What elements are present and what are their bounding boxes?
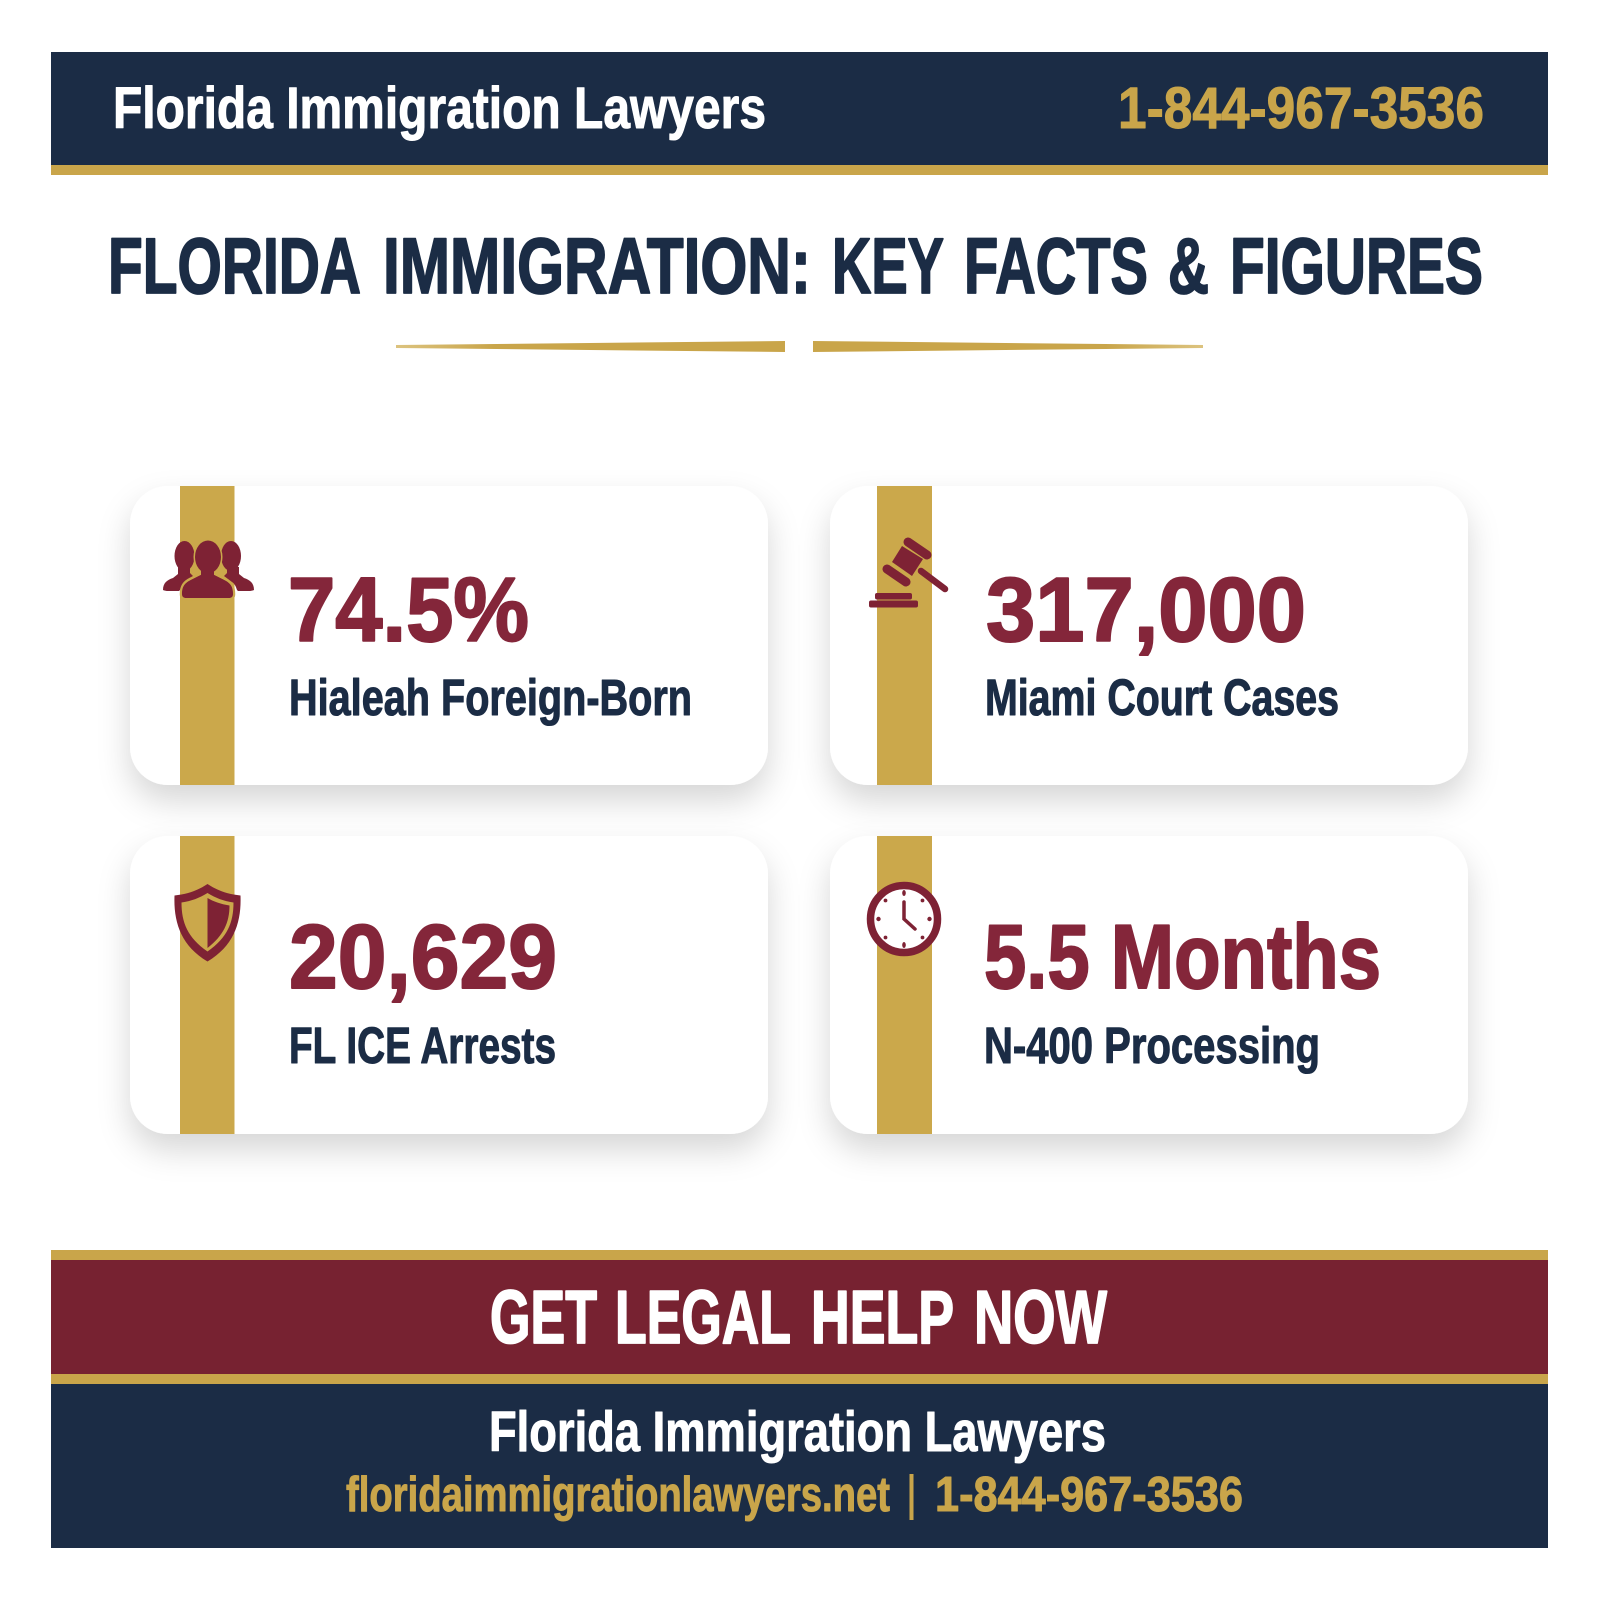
icon: gavel: [869, 542, 945, 608]
main title: FLORIDA: [108, 221, 361, 310]
main title: &: [1168, 221, 1209, 310]
maroon background: [51, 1260, 1548, 1374]
icon: group of people: [163, 540, 254, 599]
header gold rule: [51, 165, 1548, 175]
call-to-action band: [51, 1250, 1548, 1384]
upper gold rule: [51, 1250, 1548, 1260]
stat label: Hialeah Foreign-Born: [289, 669, 692, 726]
title divider: [396, 341, 1203, 352]
footer separator: [910, 1474, 914, 1520]
main title: KEY: [832, 221, 944, 310]
icon: clock: [870, 886, 938, 952]
stat label: Miami Court Cases: [985, 669, 1339, 726]
call-to-action text: NOW: [974, 1275, 1107, 1359]
header firm name: Florida Immigration Lawyers: [113, 76, 766, 141]
footer phone number: 1-844-967-3536: [935, 1468, 1243, 1522]
panel: N-400 processing time: [830, 836, 1468, 1134]
top header band: [51, 52, 1548, 175]
panel: Miami court cases: [830, 486, 1468, 785]
lower gold rule: [51, 1374, 1548, 1384]
main title: IMMIGRATION:: [383, 221, 811, 310]
card background: [830, 486, 1468, 785]
stat value: 317,000: [986, 560, 1306, 661]
header phone number: 1-844-967-3536: [1118, 76, 1484, 141]
call-to-action text: GET: [490, 1275, 597, 1359]
footer contact band: [51, 1384, 1548, 1548]
stat value: 74.5%: [288, 560, 529, 661]
footer background: [51, 1384, 1548, 1548]
gold ribbon: [877, 486, 932, 785]
stat value: 20,629: [289, 907, 557, 1008]
panel: Florida ICE arrests: [130, 836, 768, 1134]
main title: FIGURES: [1230, 221, 1483, 310]
card background: [130, 836, 768, 1134]
gold ribbon: [180, 486, 234, 785]
call-to-action text: HELP: [811, 1275, 954, 1359]
card background: [830, 836, 1468, 1134]
gold ribbon: [877, 836, 932, 1134]
icon: shield: [174, 884, 241, 962]
panel: Hialeah foreign-born: [130, 486, 768, 785]
gold ribbon: [180, 836, 234, 1134]
stat value: 5.5 Months: [984, 907, 1381, 1008]
call-to-action text: [490, 1275, 1107, 1359]
stat label: FL ICE Arrests: [289, 1017, 556, 1074]
card background: [130, 486, 768, 785]
footer firm name: Florida Immigration Lawyers: [489, 1400, 1106, 1464]
header background: [51, 52, 1548, 165]
main title: [108, 221, 1483, 310]
stat label: N-400 Processing: [984, 1017, 1320, 1074]
main title: FACTS: [964, 221, 1148, 310]
footer website: floridaimmigrationlawyers.net: [346, 1468, 890, 1522]
call-to-action text: LEGAL: [615, 1275, 791, 1359]
